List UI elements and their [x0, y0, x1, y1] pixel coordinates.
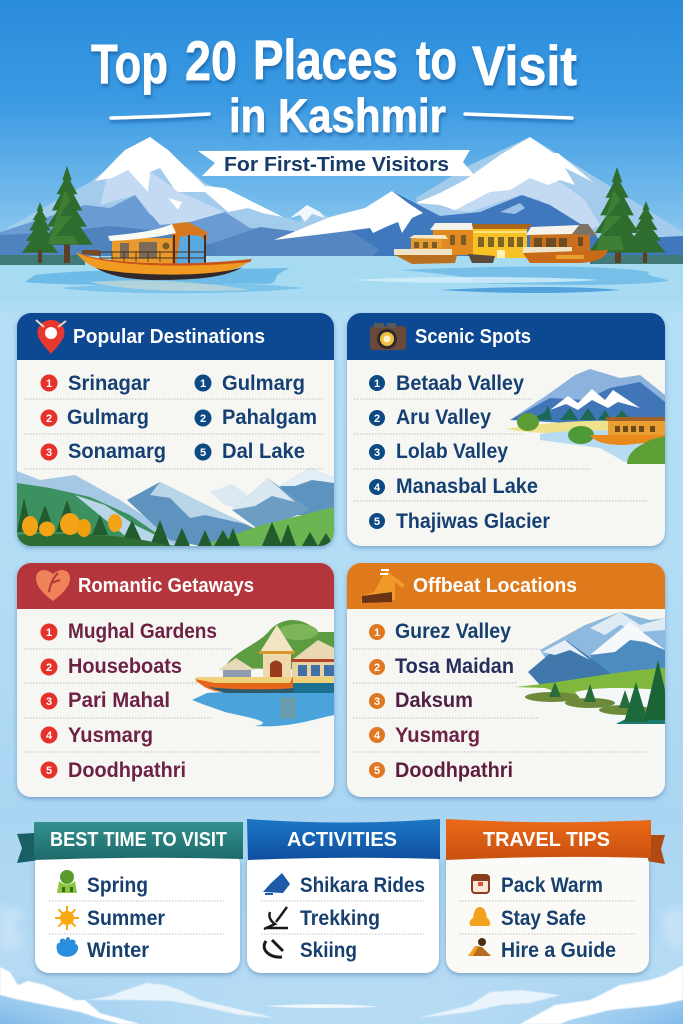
icon: winter snowflake	[57, 937, 78, 957]
icon: summer sun	[55, 906, 79, 930]
title: 20	[185, 29, 237, 92]
ribbon heading	[446, 819, 651, 860]
icon: map pin	[36, 320, 66, 354]
list column one: Gulmarg	[67, 406, 149, 429]
panel: offbeat locations	[347, 563, 672, 797]
icon: heart	[36, 570, 70, 601]
icon: skiing	[264, 940, 283, 957]
clouds	[0, 905, 683, 1024]
list: 3	[46, 696, 52, 708]
ribbon heading: ACTIVITIES	[287, 829, 397, 851]
ribbon heading	[247, 819, 440, 860]
list	[40, 620, 217, 782]
heading: Romantic Getaways	[78, 575, 254, 597]
houseboat	[394, 223, 608, 264]
list: 3	[374, 447, 380, 459]
list: Betaab Valley	[396, 372, 524, 395]
list: 2	[374, 662, 380, 674]
subtitle ribbon: For First-Time Visitors	[224, 154, 449, 176]
list: Tosa Maidan	[395, 655, 514, 678]
panel: scenic spots	[347, 313, 665, 546]
panel: activities	[247, 819, 440, 973]
list column two: 2	[200, 413, 206, 425]
panel: travel tips: Pack Warm	[501, 874, 603, 897]
icon: hire a guide	[468, 938, 491, 956]
list: 4	[374, 482, 381, 494]
list	[369, 372, 550, 533]
panel: romantic getaways	[17, 563, 334, 797]
title: Top	[91, 32, 168, 95]
lake	[0, 255, 683, 316]
icon: spring	[57, 870, 77, 893]
panel: best time to visit: Summer	[87, 907, 165, 930]
panel: popular destinations	[17, 313, 334, 546]
list: 3	[374, 696, 380, 708]
panel: activities: Skiing	[300, 939, 357, 962]
list column two: Dal Lake	[222, 440, 305, 463]
heading: Popular Destinations	[73, 326, 265, 348]
heading: Offbeat Locations	[413, 575, 577, 597]
list column one: Sonamarg	[68, 440, 166, 463]
icon: shikara	[263, 873, 290, 895]
illustration: palace and boat on lake	[192, 620, 334, 726]
list column one: 3	[46, 447, 52, 459]
panel: best time to visit: Spring	[87, 874, 148, 897]
panel: travel tips: Hire a Guide	[501, 939, 616, 962]
subtitle ribbon	[198, 150, 475, 176]
panel: travel tips: Stay Safe	[501, 907, 586, 930]
list: 2	[374, 413, 380, 425]
list: Doodhpathri	[68, 759, 186, 782]
list: Mughal Gardens	[68, 620, 217, 643]
heading: Scenic Spots	[415, 326, 531, 348]
list: 1	[46, 627, 52, 639]
list	[369, 620, 514, 782]
scene: mountains, lake, boats and trees	[0, 137, 683, 316]
list column one: 2	[46, 413, 52, 425]
list column two: 5	[200, 447, 206, 459]
title: Visit	[472, 34, 577, 97]
illustration: mountain landscape	[17, 468, 334, 546]
icon: trekking	[264, 907, 288, 929]
list column two: Pahalgam	[222, 406, 317, 429]
list: 2	[46, 662, 52, 674]
list column two: Gulmarg	[222, 372, 305, 395]
list column one: Srinagar	[68, 372, 150, 395]
list: 5	[374, 765, 380, 777]
title: Places	[253, 28, 398, 91]
list: Aru Valley	[396, 406, 491, 429]
list column two	[194, 372, 317, 463]
list: 4	[46, 730, 53, 742]
list: 1	[374, 627, 380, 639]
list: Pari Mahal	[68, 689, 170, 712]
title: in Kashmir	[229, 89, 446, 142]
trees	[22, 166, 665, 263]
illustration: valley with houseboat	[506, 369, 665, 464]
list: Houseboats	[68, 655, 182, 678]
ribbon tail	[17, 833, 40, 863]
panel: activities: Shikara Rides	[300, 874, 425, 897]
list: Doodhpathri	[395, 759, 513, 782]
icon: stay safe	[469, 907, 490, 926]
illustration: mountains and river	[515, 612, 672, 725]
list column one	[40, 372, 166, 463]
list column one: 1	[46, 378, 52, 390]
list: Lolab Valley	[396, 440, 508, 463]
mountains	[0, 137, 683, 258]
ribbon tail	[640, 835, 665, 864]
list: 5	[46, 765, 52, 777]
list: Thajiwas Glacier	[396, 510, 550, 533]
shikara boat	[76, 222, 252, 280]
panel: activities: Trekking	[300, 907, 380, 930]
panel: best time to visit: Winter	[87, 939, 149, 962]
ribbon heading: BEST TIME TO VISIT	[50, 829, 227, 851]
list: Yusmarg	[395, 724, 480, 747]
list: Daksum	[395, 689, 473, 712]
list: 4	[374, 730, 381, 742]
title: to	[416, 28, 457, 91]
title	[91, 28, 577, 142]
ribbon heading	[34, 822, 243, 860]
list: Gurez Valley	[395, 620, 511, 643]
icon: pack warm	[472, 875, 489, 893]
list: 5	[374, 516, 380, 528]
panel: best time to visit	[17, 822, 243, 973]
list: Manasbal Lake	[396, 475, 538, 498]
list: Yusmarg	[68, 724, 153, 747]
icon: hut	[361, 570, 405, 603]
list column two: 1	[200, 378, 206, 390]
list: 1	[374, 378, 380, 390]
panel: travel tips	[446, 819, 665, 973]
icon: camera	[370, 323, 406, 350]
ribbon heading: TRAVEL TIPS	[483, 829, 610, 851]
